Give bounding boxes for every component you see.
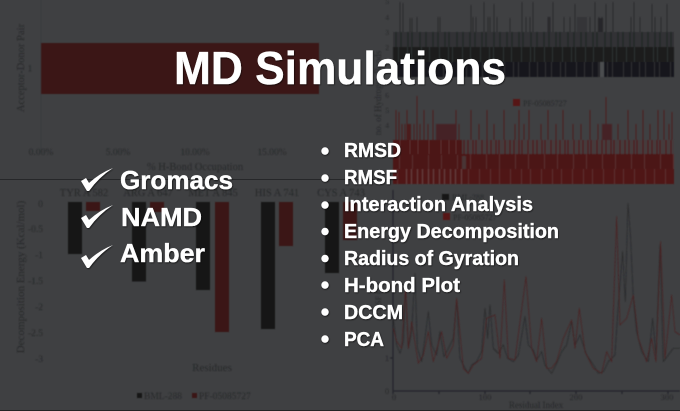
chart: RMSF by residue: 300 xyxy=(661,392,673,402)
chart: hydrogen bonds, black series xyxy=(385,0,674,77)
item: NAMD xyxy=(81,202,202,232)
bullet: PCA xyxy=(321,328,384,351)
chart: H-bond occupation: 15.00% xyxy=(257,148,287,158)
chart: H-bond occupation: 1 xyxy=(28,64,32,74)
chart: hydrogen bonds, black series: 2 xyxy=(385,43,389,52)
chart: decomposition energy xyxy=(15,188,365,402)
chart: decomposition energy: -1.5 xyxy=(28,277,43,287)
bullet: RMSF: RMSF xyxy=(344,166,397,189)
bullet: RMSF xyxy=(321,166,397,189)
chart: H-bond occupation: 10.00% xyxy=(180,148,210,158)
chart: H-bond occupation: 0.00% xyxy=(29,148,53,158)
chart: decomposition energy: -0.5 xyxy=(28,225,43,235)
panel divider xyxy=(0,178,388,180)
item: Amber xyxy=(81,238,205,268)
chart: H-bond occupation: 5.00% xyxy=(106,148,130,158)
chart: decomposition energy: -2 xyxy=(35,303,43,313)
bullet: Interaction Analysis: Interaction Analysis xyxy=(344,193,533,216)
chart: RMSF by residue: 0 xyxy=(385,387,389,396)
chart: hydrogen bonds, red series: 4 xyxy=(385,121,389,130)
chart: hydrogen bonds, red series: PF-05085727 xyxy=(523,99,567,108)
chart: decomposition energy: 0 xyxy=(38,200,43,210)
chart: hydrogen bonds, red series xyxy=(373,50,674,184)
chart: hydrogen bonds, red series: 5 xyxy=(385,106,389,115)
chart: RMSF by residue: PF-05085727 xyxy=(453,213,497,222)
chart: hydrogen bonds, red series: 6 xyxy=(385,91,389,100)
chart: decomposition energy: PF-05085727 xyxy=(199,392,251,402)
chart: RMSF by residue: RMSF (Å) xyxy=(374,282,383,317)
chart: H-bond occupation xyxy=(16,0,319,173)
chart: H-bond occupation: Acceptor-Donor Pair xyxy=(16,23,27,112)
item: Amber: Amber xyxy=(120,238,205,268)
chart: H-bond occupation: % H-Bond Occupation xyxy=(147,162,244,173)
bullet: PCA: PCA xyxy=(344,328,384,351)
chart: decomposition energy: BML-288 xyxy=(144,392,182,402)
chart: decomposition energy: Residues xyxy=(192,362,232,374)
chart: hydrogen bonds, black series: 3 xyxy=(385,28,389,37)
chart: hydrogen bonds, red series: no. of Hydrogen Bonds xyxy=(373,50,383,135)
chart: decomposition energy: -3 xyxy=(35,355,43,365)
chart: RMSF by residue: Residual Index xyxy=(509,400,564,410)
chart: RMSF by residue: 100 xyxy=(479,392,491,402)
chart: decomposition energy: HIS A 741 xyxy=(255,188,299,199)
chart: RMSF by residue: 1 xyxy=(385,354,389,363)
chart: RMSF by residue xyxy=(374,190,680,410)
item: NAMD: NAMD xyxy=(121,202,202,232)
chart: decomposition energy: CYS A 743 xyxy=(317,188,365,199)
bullet: RMSD: RMSD xyxy=(344,139,401,162)
chart: RMSF by residue: BML-288 xyxy=(452,193,484,202)
bottom edge strip xyxy=(0,410,680,411)
bullet: RMSD xyxy=(321,139,401,162)
item: Gromacs: Gromacs xyxy=(120,165,233,195)
title: MD Simulations xyxy=(174,42,506,94)
chart: RMSF by residue: 200 xyxy=(570,392,582,402)
chart: hydrogen bonds, black series: 4 xyxy=(385,13,389,22)
chart: decomposition energy: -2.5 xyxy=(28,329,43,339)
chart: decomposition energy: -1 xyxy=(35,251,43,261)
chart: decomposition energy: Decomposition Energy (Kcal/mol) xyxy=(15,200,27,353)
analysis list xyxy=(321,139,559,351)
bullet: H-bond Plot: H-bond Plot xyxy=(344,274,460,297)
bullet: Radius of Gyration: Radius of Gyration xyxy=(344,247,519,270)
chart: decomposition energy: MET A 845 xyxy=(188,188,238,199)
chart: RMSF by residue: 0 xyxy=(392,392,396,402)
software list xyxy=(81,165,233,268)
chart: decomposition energy: ARG A 647 xyxy=(123,188,173,199)
chart: decomposition energy: TYR A 582 xyxy=(60,188,108,199)
bullet: DCCM: DCCM xyxy=(344,301,403,324)
bullet: Energy Decomposition: Energy Decomposition xyxy=(344,220,559,243)
